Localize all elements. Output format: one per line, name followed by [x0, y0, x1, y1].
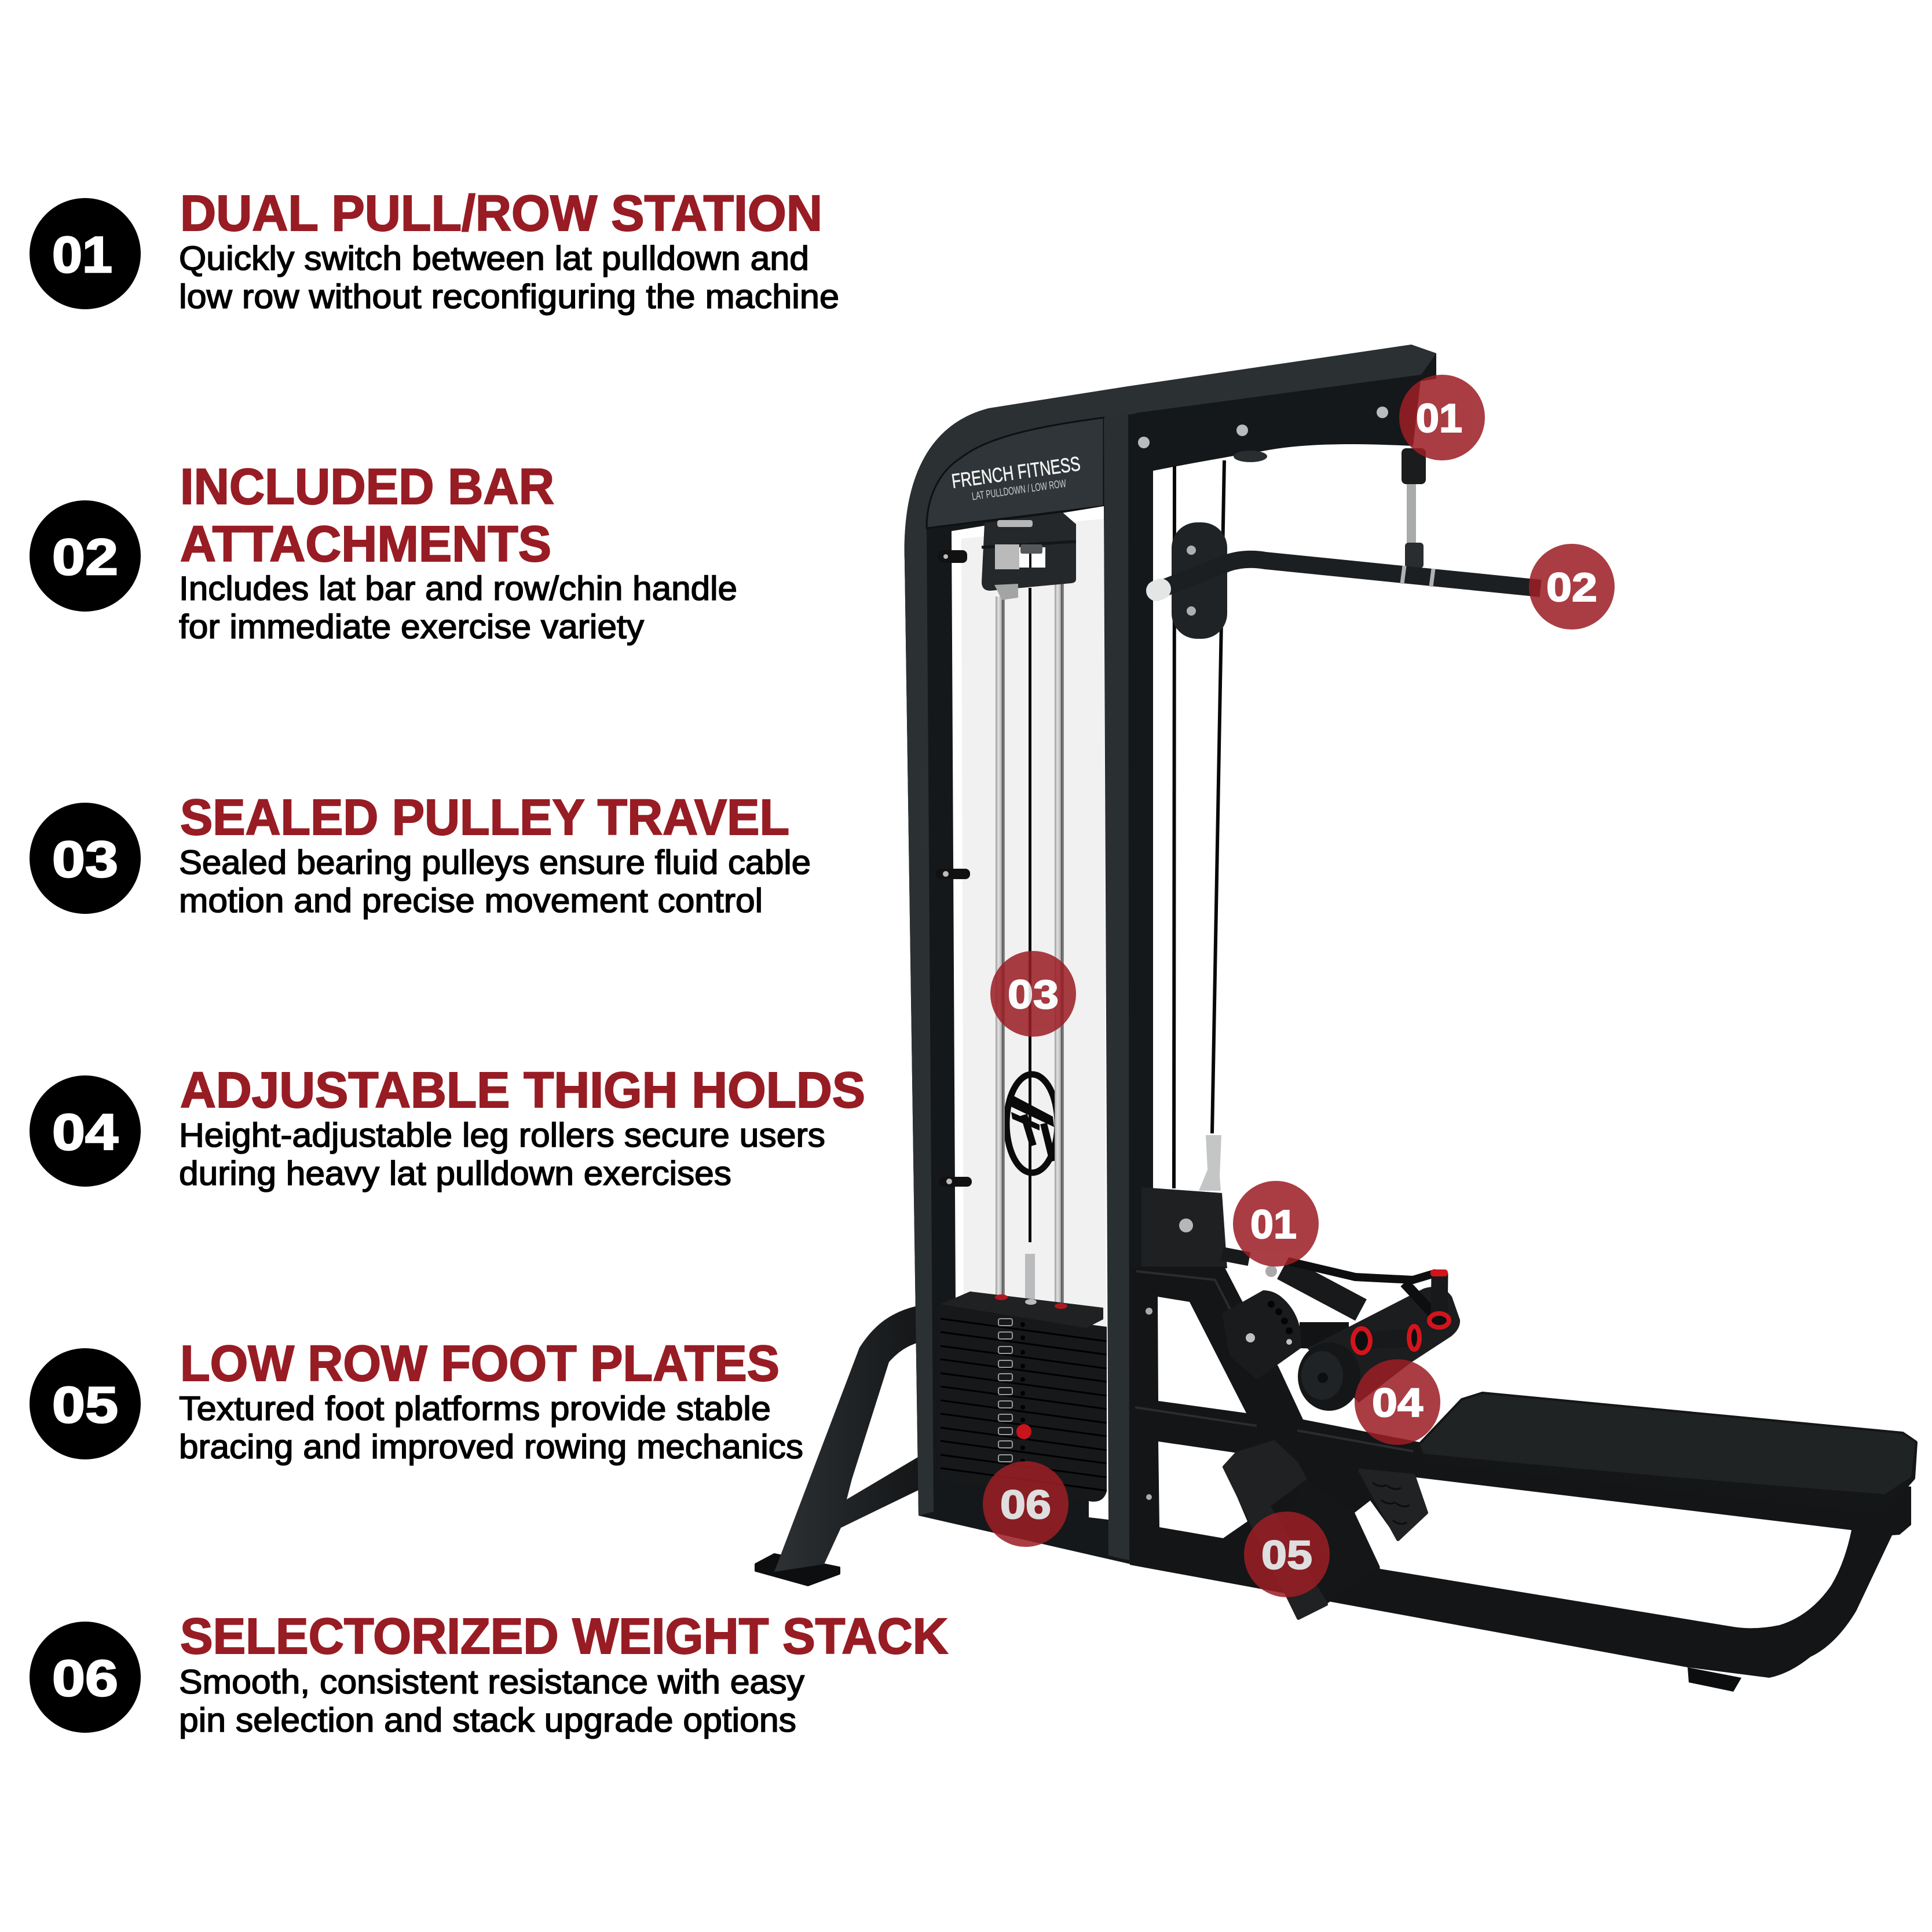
- panel: feature 04 adjustable thigh holds: [30, 1062, 865, 1192]
- heading: adjustable thigh holds: ADJUSTABLE THIGH HOLDS: [180, 1062, 865, 1118]
- text: description 03: Sealed bearing pulleys ensure fluid cable: [179, 844, 811, 881]
- badge: 04: [30, 1075, 141, 1187]
- badge: 05: [30, 1348, 141, 1459]
- heading: selectorized weight stack: SELECTORIZED WEIGHT STACK: [180, 1608, 948, 1664]
- machine: row handle and straps: [1222, 1254, 1449, 1353]
- machine branding: French Fitness label: [950, 452, 1084, 506]
- callout marker: 04 thigh hold: [1355, 1359, 1440, 1445]
- machine: rear floor foot: [1688, 1667, 1741, 1692]
- text: description 04: Height-adjustable leg rollers secure users: [179, 1117, 825, 1154]
- badge: 03: [30, 803, 141, 914]
- text: description 01: Quickly switch between lat pulldown and: [179, 240, 809, 277]
- text: description 04: during heavy lat pulldown exercises: [179, 1155, 731, 1192]
- text: description 02: [179, 570, 737, 646]
- panel: feature 02 included bar attachments: [30, 459, 737, 646]
- callout marker: 01 low pulley: [1233, 1181, 1319, 1267]
- callout marker: 02 bar: 02: [1546, 565, 1597, 610]
- badge: 05: 05: [52, 1376, 118, 1433]
- machine: low row base frame: [1130, 1267, 1911, 1692]
- callout marker: 01 top pulley: [1399, 375, 1485, 460]
- heading: included bar attachments: INCLUDED BAR: [180, 459, 554, 515]
- machine: guard window panel: [952, 506, 1108, 1520]
- icon: red selector pin: [1016, 1424, 1031, 1439]
- badge: 02: [30, 500, 141, 612]
- icon: French Fitness logo on guard: [1007, 1074, 1058, 1173]
- machine: top plate carriage: [982, 513, 1076, 600]
- callout marker: 05 foot plate: 05: [1261, 1532, 1312, 1578]
- callout marker: 01 low pulley: 01: [1250, 1202, 1297, 1247]
- machine: rear stabiliser leg: [756, 1306, 921, 1585]
- callout marker: 05 foot plate: [1244, 1512, 1330, 1597]
- text: description 05: [179, 1390, 803, 1466]
- machine: lat bar with swivel: [1157, 448, 1541, 591]
- illustration: lat pulldown / low row machine: [756, 345, 1915, 1692]
- machine: seat pad: [1419, 1394, 1915, 1512]
- callout marker: 03 rods: 03: [1008, 972, 1059, 1017]
- panel: feature 01 dual pull/row station: [30, 185, 839, 316]
- badge: 06: [30, 1622, 141, 1733]
- machine branding: French Fitness label: FRENCH FITNESS: [950, 452, 1082, 493]
- machine: lower cable hook and block: [1141, 1135, 1227, 1268]
- badge: 03: 03: [52, 830, 118, 888]
- heading: included bar attachments: [180, 459, 554, 572]
- badge: 02: 02: [52, 528, 118, 586]
- callout marker: 06 weight stack: 06: [1000, 1482, 1051, 1527]
- text: description 02: for immediate exercise variety: [179, 608, 644, 646]
- text: description 01: [179, 240, 839, 316]
- machine: upright frame and top beam: [905, 345, 1436, 1568]
- text: description 02: Includes lat bar and row/chin handle: [179, 570, 737, 608]
- heading: included bar attachments: ATTACHMENTS: [180, 516, 551, 572]
- panel: feature 03 sealed pulley travel: [30, 789, 811, 920]
- text: description 06: Smooth, consistent resistance with easy: [179, 1663, 804, 1701]
- badge: 01: [30, 198, 141, 309]
- machine: foot plates: [1224, 1442, 1426, 1618]
- panel: feature 05 low row foot plates: [30, 1335, 803, 1466]
- badge: 04: 04: [52, 1103, 118, 1161]
- machine: guard mounting tabs: [936, 550, 972, 1187]
- callout marker: 01 top pulley: 01: [1416, 396, 1462, 441]
- machine: pulley plate: [1172, 522, 1227, 639]
- callout marker: 04 thigh hold: 04: [1372, 1380, 1423, 1425]
- machine: long cables: [1174, 460, 1224, 1188]
- text: description 06: pin selection and stack upgrade options: [179, 1702, 796, 1739]
- machine branding: French Fitness label: LAT PULLDOWN / LOW ROW: [971, 478, 1067, 503]
- heading: dual pull/row station: DUAL PULL/ROW STATION: [180, 185, 822, 241]
- text: description 01: low row without reconfiguring the machine: [179, 278, 839, 316]
- text: description 03: [179, 844, 811, 920]
- text: description 03: motion and precise movement control: [179, 882, 763, 920]
- text: description 05: Textured foot platforms provide stable: [179, 1390, 771, 1428]
- heading: low row foot plates: LOW ROW FOOT PLATES: [180, 1335, 780, 1392]
- machine: top cable bracket: [1136, 375, 1421, 474]
- callout marker: 02 bar: [1529, 544, 1615, 630]
- machine: guide rods and stack cable: [996, 582, 1064, 1306]
- text: description 04: [179, 1117, 825, 1192]
- machine: weight stack: [941, 1291, 1107, 1502]
- text: description 06: [179, 1663, 804, 1739]
- callout marker: 03 rods: [990, 951, 1076, 1037]
- badge: 06: 06: [52, 1649, 118, 1707]
- callout marker: 06 weight stack: [983, 1461, 1069, 1547]
- badge: 01: 01: [52, 226, 112, 283]
- text: description 05: bracing and improved rowing mechanics: [179, 1428, 803, 1466]
- panel: feature 06 selectorized weight stack: [30, 1608, 948, 1739]
- heading: sealed pulley travel: SEALED PULLEY TRAVEL: [180, 789, 789, 846]
- machine: thigh hold bracket and roller pads: [1222, 1254, 1460, 1411]
